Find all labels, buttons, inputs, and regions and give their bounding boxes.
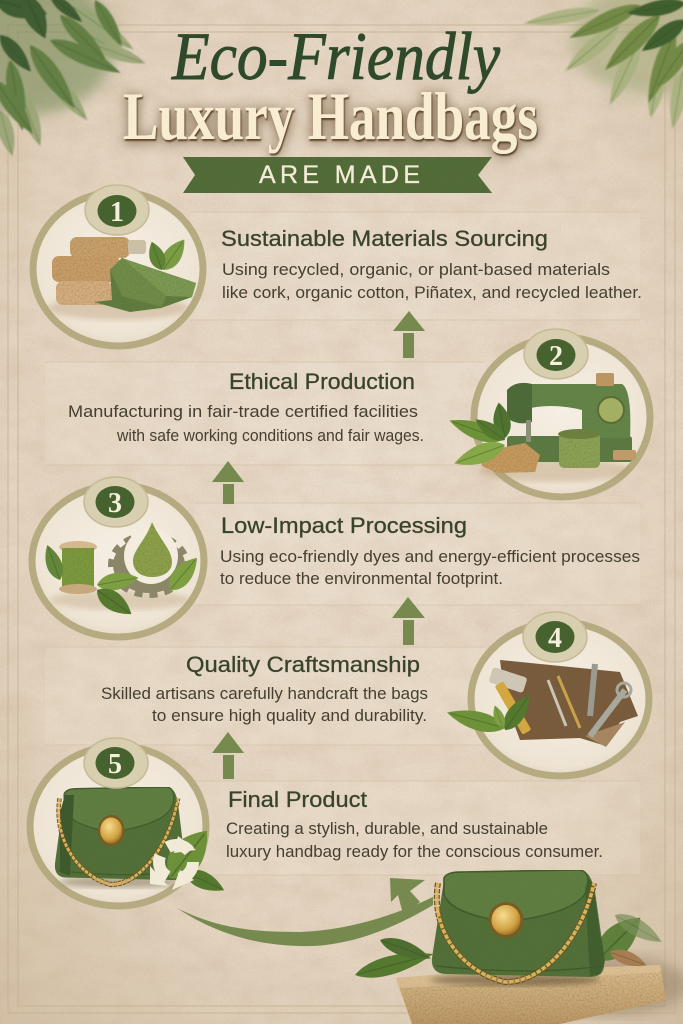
icon: recycling symbol with leaves [150,821,228,898]
top-left foliage [0,0,148,158]
icon: leather and craft tools [445,660,638,747]
left leaves [353,933,436,984]
title block [123,18,538,193]
heading: Quality Craftsmanship [186,652,420,677]
icon: large green handbag [430,870,605,986]
heading: Sustainable Materials Sourcing [221,226,548,251]
step 4 text [101,652,428,725]
icon: spool, gear and dye drop [40,522,204,622]
description line 2: with safe working conditions and fair wages. [116,426,424,445]
title: Luxury Handbags: Luxury Handbags [123,78,538,154]
step 3 text [220,513,640,588]
number badge 4: 4 [548,623,562,654]
heading: Low-Impact Processing [221,513,467,538]
description: Using eco-friendly dyes and energy-efficient processes [220,547,640,566]
step 1 text [221,226,642,302]
description line 2: like cork, organic cotton, Piñatex, and recycled leather. [222,283,642,302]
number badge 1: 1 [110,197,124,228]
step 5 text [226,787,603,861]
heading: Final Product [228,787,368,812]
step 2 medallion [446,329,650,497]
stone pedestal [396,955,683,1024]
icon: small green handbag [55,787,186,888]
number badge 4 [523,612,587,662]
arrow: step 2 to step 1 [393,311,425,358]
ribbon banner: Are Made: ARE MADE [259,161,420,189]
description: Manufacturing in fair-trade certified facilities [68,402,418,421]
step 5 medallion [30,738,228,906]
description line 2: to reduce the environmental footprint. [220,569,503,588]
top-right foliage [522,0,683,130]
curved arrow to final bag [177,878,433,946]
number badge 5: 5 [108,749,122,780]
number badge 3 [84,477,148,527]
arrow: step 5 to step 4 [212,732,244,779]
description line 2: to ensure high quality and durability. [152,706,427,725]
arrow: step 3 to step 2 [212,461,244,504]
icon: sewing machine [446,373,636,482]
right leaves [588,907,666,972]
number badge 5 [84,738,148,788]
ribbon banner: Are Made [183,157,492,193]
step 1 medallion [33,185,203,346]
description: Using recycled, organic, or plant-based materials [222,260,610,279]
heading: Ethical Production [229,369,415,394]
step 3 medallion [32,477,204,637]
arrow: step 4 to step 3 [392,597,425,645]
icon: cork rolls and green fabric [48,235,196,320]
description: Skilled artisans carefully handcraft the bags [101,684,428,703]
step 4 medallion [445,612,649,776]
final product display [353,870,683,1024]
description line 2: luxury handbag ready for the conscious consumer. [226,842,603,861]
number badge 2 [524,329,588,379]
number badge 3: 3 [108,488,122,519]
number badge 2: 2 [549,341,563,372]
description: Creating a stylish, durable, and sustainable [226,819,548,838]
panel bands behind steps [45,212,640,875]
title: Eco-Friendly: Eco-Friendly [171,18,501,94]
number badge 1 [85,185,149,235]
step 2 text [68,369,424,445]
